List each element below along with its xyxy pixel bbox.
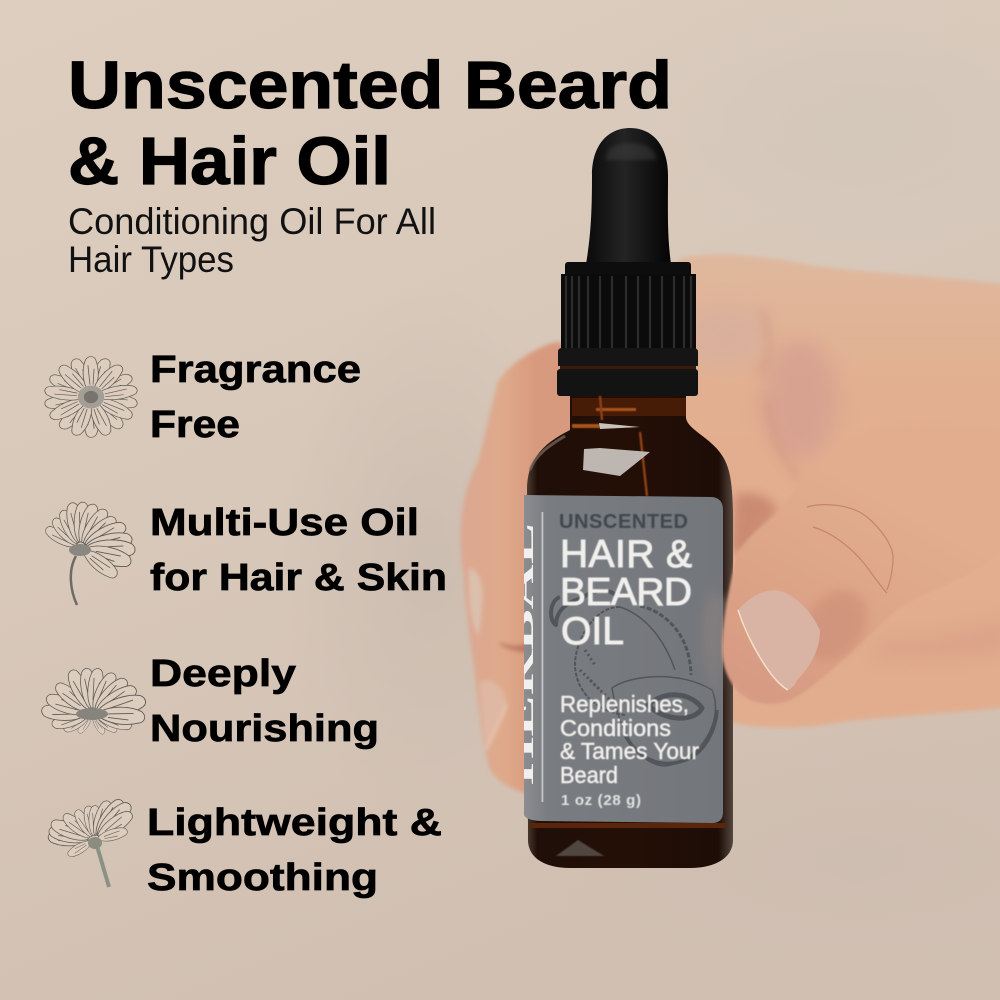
thumb knuckle creases <box>807 505 893 593</box>
label text: & Tames Your <box>560 738 699 764</box>
title: & Hair Oil <box>68 124 391 199</box>
feature text: Deeply <box>150 653 296 695</box>
label text: Beard <box>560 762 618 788</box>
label text: Conditions <box>560 715 671 741</box>
amber glass body <box>527 396 733 868</box>
cap collar <box>557 348 698 396</box>
icon: daisy front view <box>44 357 138 437</box>
subtitle <box>68 201 436 280</box>
hand: thumb <box>701 423 1000 704</box>
thumbnail <box>738 590 820 690</box>
icon: daisy side view with stem <box>43 502 135 605</box>
label text: UNSCENTED <box>559 511 688 533</box>
label text: HAIR & <box>560 533 692 576</box>
feature: multi-use oil <box>43 502 447 605</box>
title <box>68 48 672 199</box>
label text: Replenishes, <box>560 691 689 717</box>
hand: left fingers <box>461 342 580 795</box>
subtitle: Conditioning Oil For All <box>68 201 436 242</box>
brand name: HERBAL <box>507 523 540 785</box>
icon: daisy tilted view <box>41 667 148 736</box>
feature text: Multi-Use Oil <box>150 502 419 544</box>
dropper bulb <box>586 128 671 264</box>
label text: OIL <box>561 610 624 653</box>
feature: fragrance free <box>44 349 361 446</box>
label text: BEARD <box>560 571 692 614</box>
label divider <box>542 512 543 802</box>
feature text: Smoothing <box>147 857 378 899</box>
feature text <box>150 653 379 750</box>
hand: back of hand and palm <box>660 254 1000 728</box>
avocado illustration <box>551 591 717 766</box>
feature: deeply nourishing <box>41 653 379 750</box>
subtitle: Hair Types <box>68 239 234 280</box>
product label <box>507 495 723 823</box>
label text <box>559 511 699 809</box>
feature text: for Hair & Skin <box>150 557 447 599</box>
ribbed cap <box>561 262 696 352</box>
feature text <box>150 349 361 446</box>
feature: lightweight and smoothing <box>48 796 442 899</box>
feature text <box>147 802 442 899</box>
feature text: Lightweight & <box>147 802 442 844</box>
title: Unscented Beard <box>68 48 672 123</box>
feature text: Nourishing <box>150 708 379 750</box>
feature text: Free <box>150 404 240 446</box>
feature text <box>150 502 447 599</box>
label text: 1 oz (28 g) <box>561 792 641 809</box>
icon: daisy profile with stem <box>48 796 136 887</box>
feature text: Fragrance <box>150 349 361 391</box>
product bottle <box>41 58 894 898</box>
